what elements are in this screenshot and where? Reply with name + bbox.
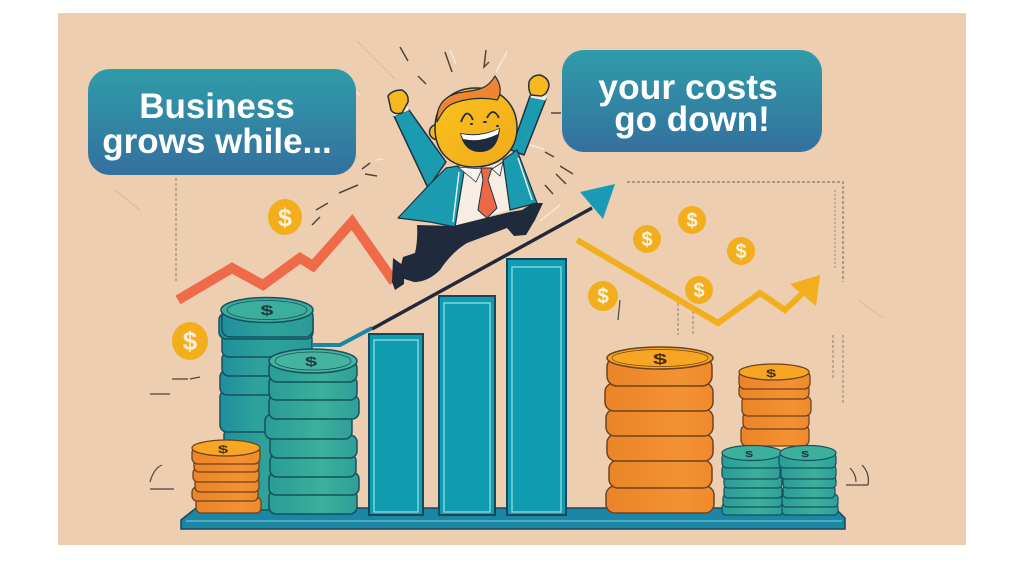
coin: $ xyxy=(278,204,292,232)
coin: $ xyxy=(597,285,609,308)
shoe xyxy=(392,258,404,290)
growth arrow with teal connector xyxy=(313,184,615,345)
bar 2 xyxy=(439,296,495,515)
callout: business grows: Business xyxy=(139,87,295,126)
coin: $ xyxy=(693,280,705,302)
mouth xyxy=(460,128,500,152)
dollar mark: $ xyxy=(218,443,229,456)
lapel highlights xyxy=(453,158,532,222)
callout: business grows: grows while... xyxy=(102,122,332,161)
coin xyxy=(727,237,755,265)
teeth xyxy=(461,129,499,140)
nose dots xyxy=(471,122,498,126)
dollar mark: $ xyxy=(801,450,810,459)
sketch guide lines and burst marks xyxy=(115,41,883,489)
character: cheering businessman xyxy=(388,75,549,290)
dollar mark: $ xyxy=(305,355,317,369)
callout: costs go down: your costs xyxy=(598,67,778,107)
jacket right xyxy=(503,150,537,210)
teal coin stack small left xyxy=(722,446,783,515)
bar chart xyxy=(369,259,566,515)
callout: costs go down xyxy=(562,50,822,152)
head xyxy=(435,88,517,167)
arms xyxy=(394,96,546,188)
dollar mark: $ xyxy=(261,304,274,319)
callout: costs go down: go down! xyxy=(614,100,770,139)
teal coin stack small right xyxy=(779,446,838,515)
coin xyxy=(633,225,661,253)
red rising line chart xyxy=(178,222,394,300)
orange coin stack right xyxy=(739,364,811,446)
coin: $ xyxy=(183,326,198,356)
teal coin stack back xyxy=(219,298,313,510)
shirt xyxy=(455,163,510,226)
collar xyxy=(458,162,503,182)
bar 3 xyxy=(507,259,566,515)
orange coin stack small left xyxy=(192,440,261,513)
teal coin stack front xyxy=(265,349,359,514)
yellow falling and recovering line chart xyxy=(577,240,820,323)
bar 1 xyxy=(369,334,423,515)
coin xyxy=(172,322,208,360)
left fist xyxy=(388,90,408,114)
dollar mark: $ xyxy=(653,351,668,367)
dollar mark: $ xyxy=(745,450,754,459)
coin: $ xyxy=(686,210,698,232)
trousers xyxy=(398,203,543,282)
jacket left xyxy=(398,166,464,227)
coin xyxy=(678,206,706,234)
tie xyxy=(478,168,497,218)
callout: business grows xyxy=(88,69,356,175)
cuffs xyxy=(393,95,546,114)
coin: $ xyxy=(641,229,653,251)
dollar mark: $ xyxy=(766,367,777,380)
orange coin stack large xyxy=(605,347,714,513)
right fist xyxy=(529,75,549,96)
hair xyxy=(437,76,500,122)
coin xyxy=(268,199,302,235)
coin: $ xyxy=(735,241,747,263)
base platform xyxy=(181,508,845,529)
eyes xyxy=(461,112,499,122)
coin xyxy=(685,276,713,304)
ear xyxy=(430,124,444,140)
dollar coins floating xyxy=(172,199,755,360)
coin xyxy=(588,281,618,311)
